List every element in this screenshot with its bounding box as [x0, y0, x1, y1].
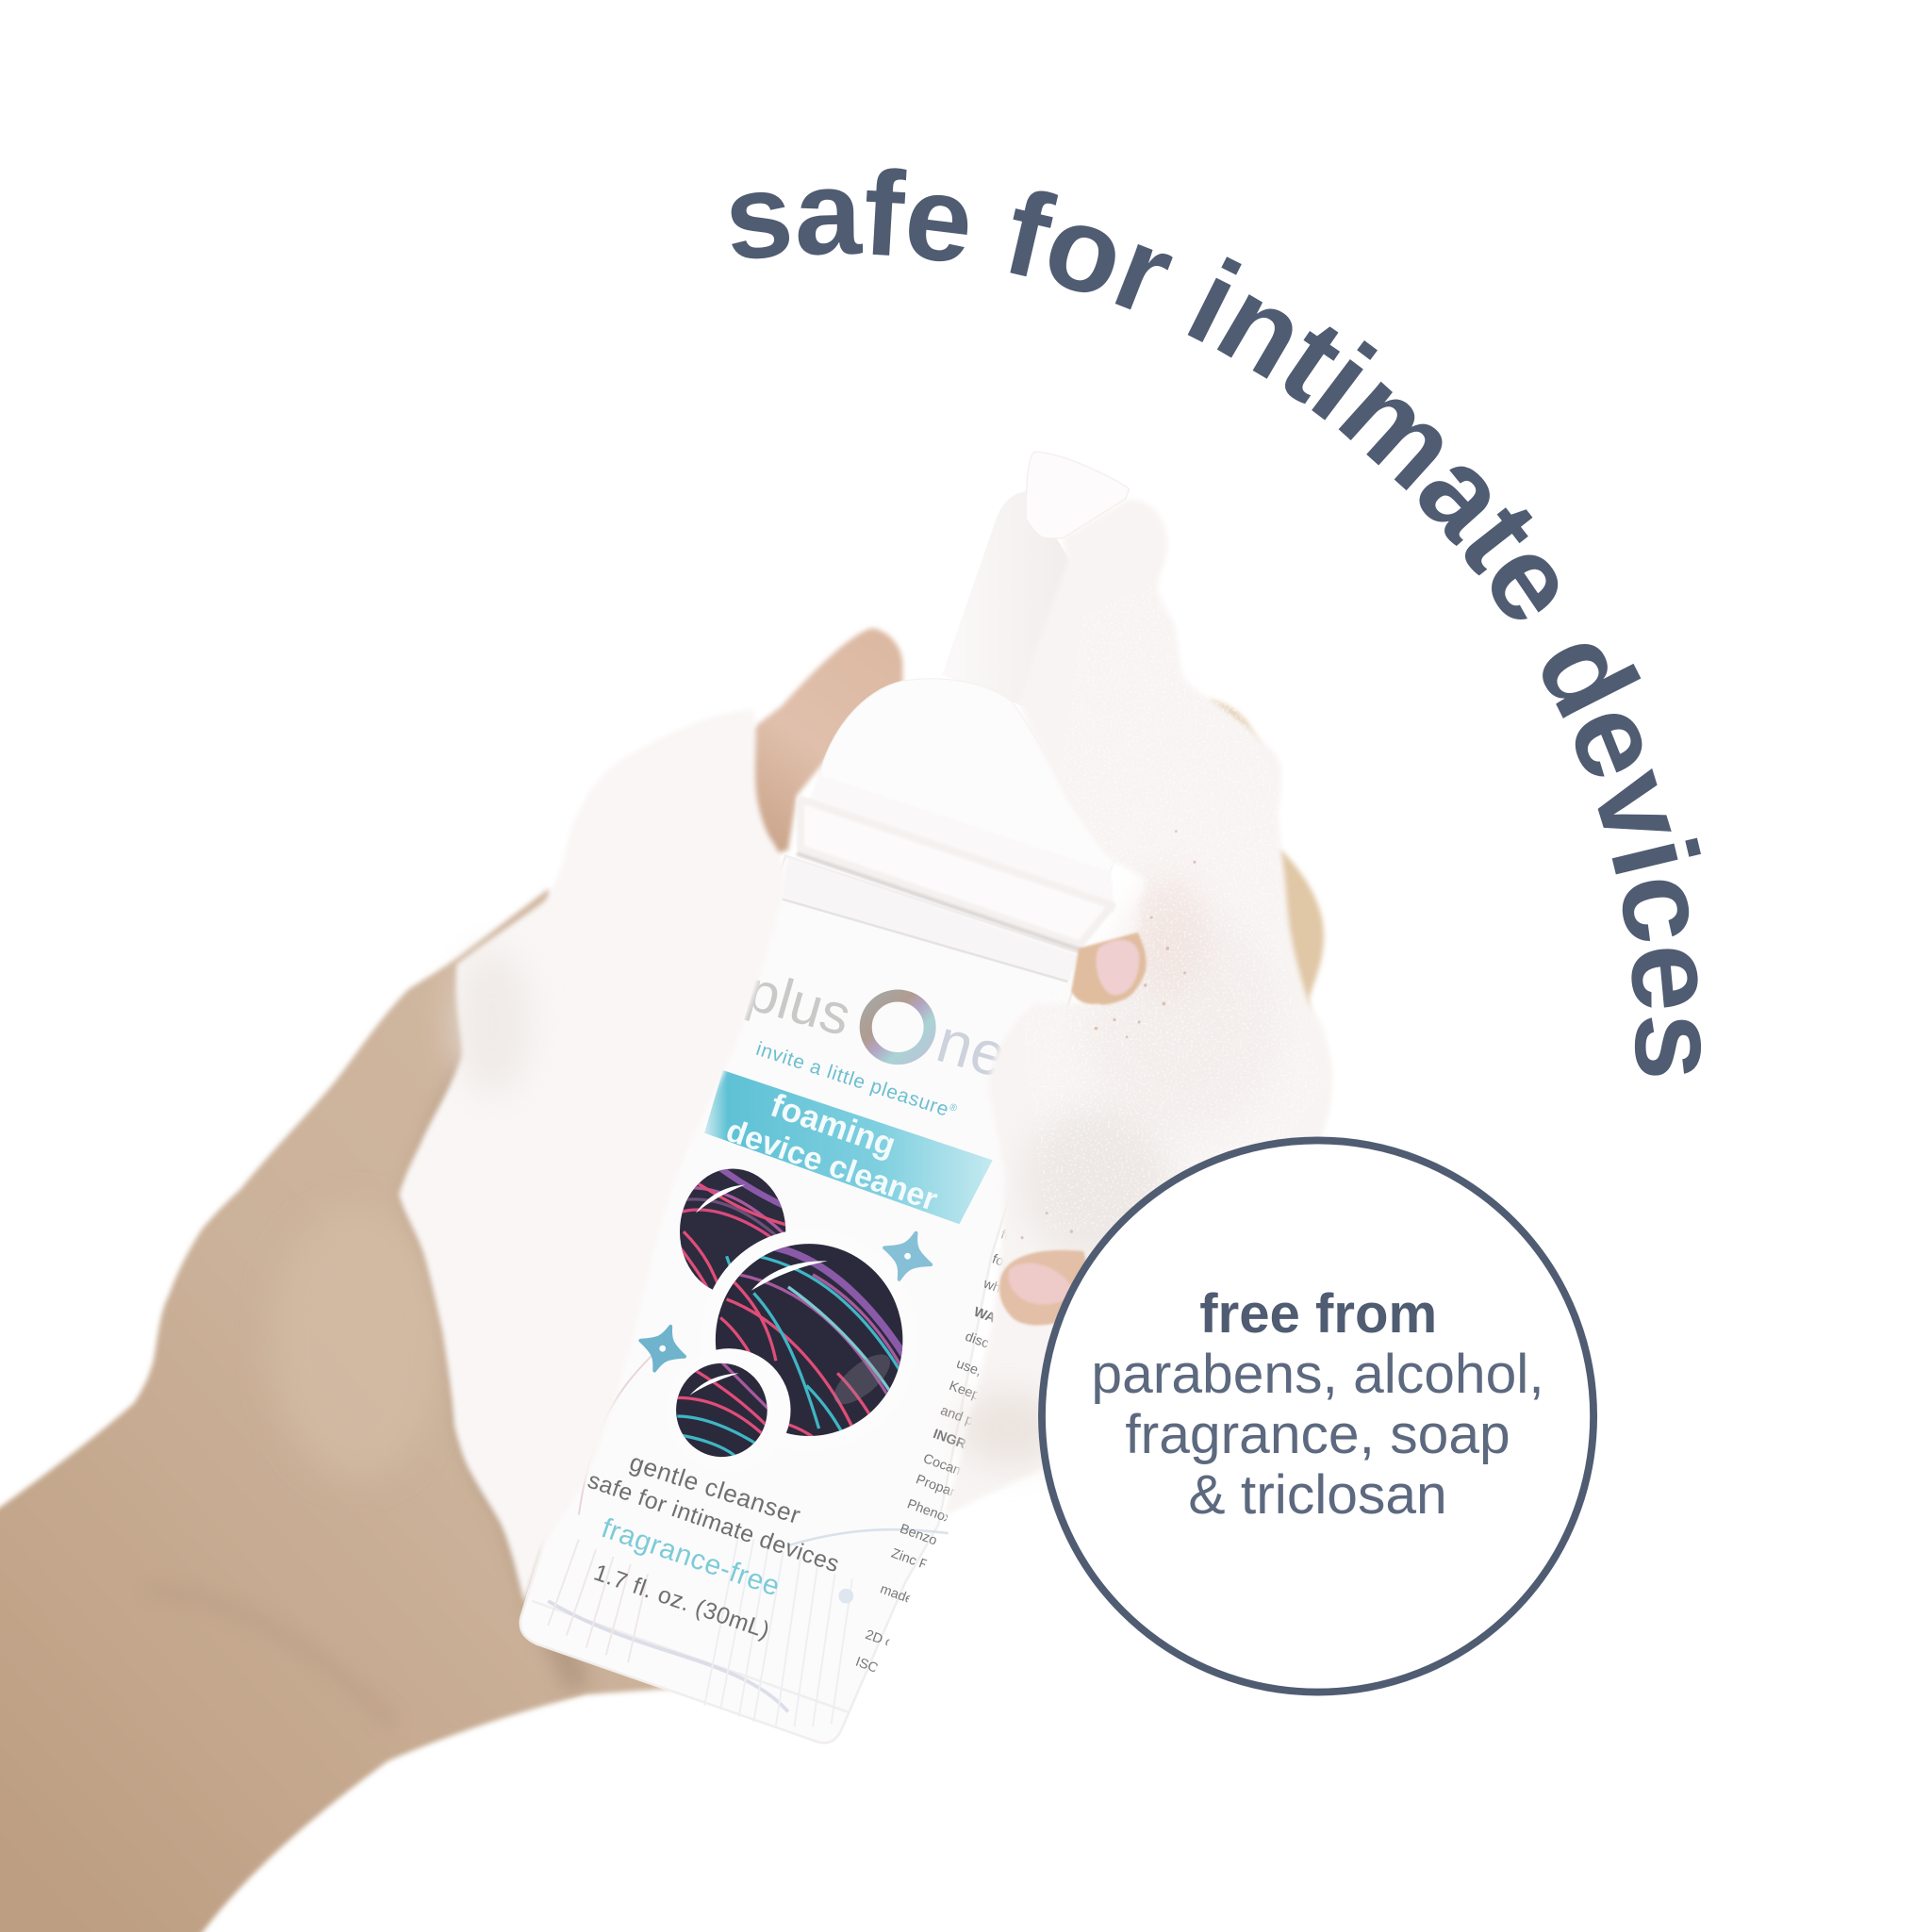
- banner: foaming device cleaner: [704, 1070, 993, 1224]
- banner: foaming device cleaner: device cleaner: [721, 1113, 942, 1218]
- top bubble: [679, 1169, 786, 1290]
- side label small print: Cocamidopropyl: [921, 1451, 1018, 1499]
- side label small print: for: [990, 1251, 1010, 1271]
- sparkle icon right: [876, 1225, 939, 1288]
- side label small print: wh: [981, 1276, 1003, 1296]
- hand and arm: [0, 889, 886, 1932]
- dome cap: [819, 679, 1114, 881]
- side label small print: Keep out: [947, 1379, 1003, 1412]
- foam speckles: [1021, 830, 1197, 1239]
- inner collar ring: [807, 775, 1114, 914]
- side label small print: and pets: [938, 1403, 992, 1435]
- circle outline: [1042, 1140, 1593, 1693]
- brand logo: plusOne: plus: [740, 958, 858, 1048]
- front label copy: fragrance-free: [598, 1512, 784, 1603]
- foam bubble texture: [1022, 579, 1324, 1231]
- brand logo: plusOne: [740, 958, 1015, 1091]
- banner: foaming device cleaner: foaming: [766, 1087, 900, 1164]
- side label small print: Propanediol: [914, 1472, 987, 1511]
- callout body: [1091, 1344, 1544, 1526]
- tagline: ®: [948, 1102, 959, 1115]
- right foam: [943, 499, 1332, 1516]
- side label small print: made in USA: [878, 1582, 959, 1624]
- bottle body: [520, 856, 1083, 1742]
- callout body: parabens, alcohol,: [1091, 1344, 1544, 1405]
- white ring around big bubble: [701, 1229, 917, 1451]
- back fingers on right: [1208, 700, 1324, 1146]
- fingertip with nail upper: [1071, 933, 1147, 1004]
- heading: safe for intimate devices: safe for intimate devices: [732, 168, 1701, 1076]
- nozzle: [942, 491, 1071, 708]
- outer collar: [800, 800, 1112, 945]
- sparkle icon left: [633, 1318, 693, 1379]
- bubble artwork: [676, 1169, 903, 1458]
- foam shading: [455, 579, 1324, 1465]
- photo: hand holding foaming bottle: [0, 452, 1332, 1932]
- bottle: [520, 491, 1114, 1742]
- callout circle: free from: [1042, 1140, 1593, 1693]
- side label small print: Phenoxyethanol: [905, 1496, 1001, 1544]
- side label small print: [856, 1230, 1007, 1672]
- shadow along foam: [434, 1069, 590, 1697]
- brand logo: plusOne: ne: [930, 1006, 1015, 1091]
- front label copy: [585, 1447, 843, 1644]
- tagline: invite a little pleasure: [753, 1038, 952, 1121]
- front label copy: 1.7 fl. oz. (30mL): [590, 1560, 773, 1644]
- fingertip with nail lower: [999, 1250, 1096, 1325]
- side label small print: ISO 9001: [853, 1655, 913, 1688]
- collar gap: [797, 853, 1082, 950]
- side label small print: INGREDIENTS: [931, 1427, 1023, 1473]
- side label small print: Zinc Ricinoleate: [889, 1546, 984, 1593]
- lower band: [782, 857, 1079, 982]
- left foam: [399, 709, 784, 1604]
- callout body: & triclosan: [1188, 1464, 1447, 1526]
- front label copy: safe for intimate devices: [585, 1468, 843, 1577]
- wrist crease: [148, 1589, 394, 1725]
- bottom cap line: [532, 1601, 848, 1711]
- callout body: fragrance, soap: [1125, 1404, 1510, 1465]
- white ring around small bubble: [668, 1348, 791, 1472]
- label line art: [548, 1355, 949, 1726]
- label top line: [782, 899, 1067, 982]
- callout heading: free from: [1199, 1283, 1437, 1345]
- palm highlight: [291, 1256, 413, 1461]
- side label small print: discontinue: [963, 1329, 1032, 1367]
- side label small print: Benzoic Acid: [898, 1522, 976, 1562]
- front label copy: gentle cleanser: [626, 1447, 804, 1529]
- top finger behind foam: [739, 628, 902, 862]
- side label small print: 2D code: [864, 1627, 916, 1659]
- side label small print: for: [999, 1227, 1019, 1247]
- side label small print: use, and: [954, 1356, 1008, 1388]
- side label small print: WARNING: [971, 1305, 1038, 1341]
- hand shading: [148, 973, 579, 1725]
- gloss highlight: [833, 1354, 890, 1405]
- big bubble: [715, 1244, 903, 1436]
- nozzle tip: [1026, 452, 1130, 538]
- small bubble: [676, 1363, 767, 1458]
